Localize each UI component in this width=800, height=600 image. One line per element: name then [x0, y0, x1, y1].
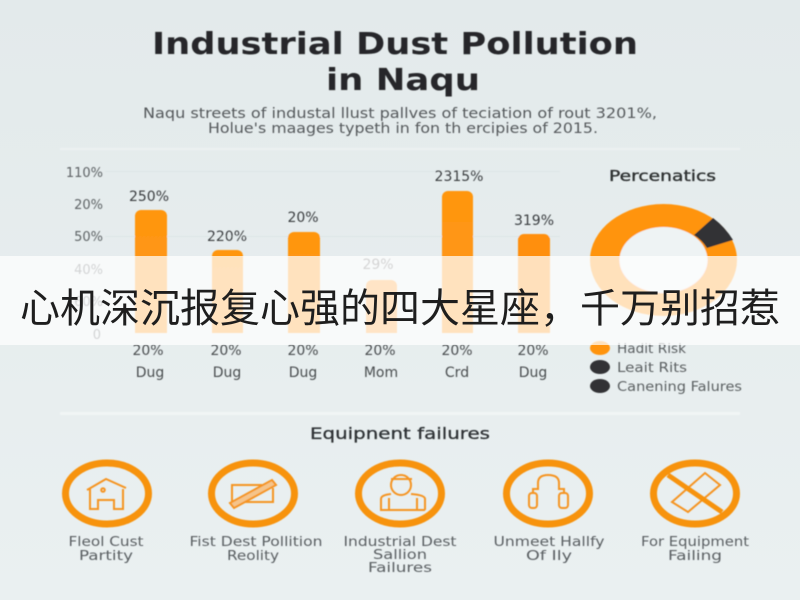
icon label: for equipment: For Equipment: [641, 535, 749, 550]
icon label: industrial dust: Industrial Dest: [344, 535, 456, 550]
icon label: industrial dust: Failures: [368, 561, 432, 576]
bar value labels: 20%: [287, 210, 319, 226]
icon: dust tool: [212, 463, 294, 524]
x axis labels: Dug: [136, 365, 164, 381]
title: Industrial Dust Pollution: [152, 27, 638, 62]
icon label: fist dest: Fist Dest Pollition: [190, 535, 322, 550]
icon label: industrial dust: Sallion: [373, 548, 427, 563]
x axis labels: 20%: [132, 343, 164, 359]
x axis labels: Crd: [445, 365, 469, 381]
title: in Naqu: [326, 63, 480, 98]
bar value labels: 29%: [362, 257, 394, 273]
icon label: for equipment: [641, 535, 749, 564]
icon label: fleol cust: Partity: [79, 549, 133, 564]
donut chart heading: Percenatics: [609, 167, 716, 185]
icon label: fist dest: Reolity: [227, 549, 279, 564]
subtitle text block: Naqu streets of industal llust pallves of teciation of rout 3201%,: [143, 106, 657, 122]
y axis labels: 40%: [74, 263, 103, 278]
donut chart: [590, 204, 737, 316]
y axis labels: 50%: [74, 230, 103, 245]
icon label: unmeet: Unmeet Hallfy: [494, 535, 605, 550]
y axis labels: 0: [93, 328, 101, 343]
x axis labels: Dug: [519, 365, 547, 381]
icon label: for equipment: Failing: [668, 549, 722, 564]
bar value labels: [129, 169, 554, 273]
x axis labels: Dug: [289, 365, 317, 381]
bar value labels: 250%: [129, 189, 169, 205]
donut legend: [590, 341, 742, 395]
y axis labels: [66, 166, 103, 343]
caption text: 心机深沉报复心强的四大星座，千万别招惹: [20, 287, 780, 331]
icon label: fist dest: [190, 535, 322, 564]
y axis labels: 110%: [66, 166, 103, 181]
icon label: fleol cust: Fleol Cust: [68, 535, 144, 550]
x axis labels: 20%: [441, 343, 473, 359]
x axis labels: Mom: [364, 365, 398, 381]
y axis labels: 60%: [74, 295, 103, 310]
donut legend: Leait Rits: [617, 361, 687, 376]
icon: headset: [506, 463, 590, 524]
subtitle text block: [143, 106, 657, 137]
x axis labels: [132, 343, 549, 381]
x axis labels: Dug: [213, 365, 241, 381]
bar value labels: 220%: [207, 229, 247, 245]
icon label: unmeet: [494, 535, 605, 564]
title: [152, 27, 638, 98]
icon: worker: [358, 463, 442, 524]
donut legend: Hadit Risk: [617, 342, 686, 357]
icon: equipment prohibited: [654, 463, 736, 524]
y axis labels: 20%: [74, 198, 103, 213]
icon label: unmeet: Of Ily: [526, 549, 572, 564]
x axis labels: 20%: [210, 343, 242, 359]
bar value labels: 319%: [514, 213, 554, 229]
x axis labels: 20%: [517, 343, 549, 359]
icon label: fleol cust: [68, 535, 144, 564]
white caption band: [0, 256, 800, 345]
bar value labels: 2315%: [435, 169, 483, 185]
bar chart: [66, 166, 554, 381]
x axis labels: 20%: [364, 343, 396, 359]
section heading: equipment failures: Equipnent failures: [310, 424, 490, 443]
bars: [135, 191, 550, 333]
icon: house: [66, 463, 148, 524]
icon label: industrial dust: [344, 535, 456, 576]
donut legend: Canening Falures: [617, 380, 742, 395]
x axis labels: 20%: [287, 343, 319, 359]
subtitle text block: Holue's maages typeth in fon th ercipies of 2015.: [208, 121, 598, 137]
